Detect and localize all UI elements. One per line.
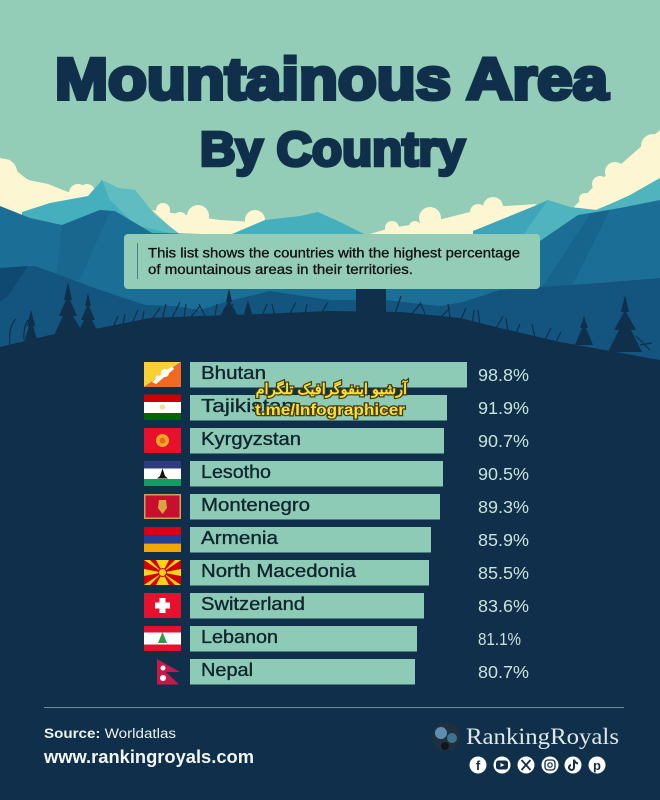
footer divider	[44, 707, 624, 708]
icon: globe logo	[432, 723, 460, 751]
flag: Armenia	[144, 527, 181, 552]
row: Nepal	[157, 659, 529, 684]
row: Montenegro: 89.3%	[478, 497, 529, 517]
clouds	[0, 130, 660, 236]
title	[55, 47, 609, 176]
illustration: clouds and mountains	[0, 130, 660, 365]
row: Kyrgyzstan: 90.7%	[478, 431, 529, 451]
middle blue range	[0, 200, 660, 320]
row: Armenia: 85.9%	[478, 530, 529, 550]
source text: www.rankingroyals.com	[43, 747, 254, 767]
watermark	[255, 379, 409, 419]
row: Lebanon	[144, 626, 521, 652]
row: Bhutan: 98.8%	[478, 365, 529, 385]
flag: Bhutan	[144, 362, 181, 387]
back teal ranges	[22, 180, 182, 240]
intro callout: of mountainous areas in their territories.	[148, 261, 413, 277]
row: Lesotho	[144, 461, 529, 486]
source text	[43, 726, 254, 767]
flag: North Macedonia	[144, 560, 181, 585]
flag: Lesotho	[144, 461, 181, 486]
row: Switzerland: Switzerland	[201, 594, 305, 614]
title: Mountainous Area	[55, 47, 609, 112]
row: Armenia	[144, 527, 529, 552]
trees	[22, 282, 642, 352]
icon: facebook: f	[476, 758, 481, 773]
row: Lebanon: 81.1%	[478, 629, 521, 649]
row: Bhutan: Bhutan	[201, 363, 266, 383]
row: Bhutan	[144, 362, 529, 388]
row: Montenegro	[144, 494, 529, 520]
flag: Nepal	[157, 659, 180, 684]
dark lower panel	[0, 360, 660, 800]
intro callout: This list shows the countries with the highest percentage	[148, 244, 520, 260]
flag: Tajikistan	[144, 394, 181, 420]
flag: Kyrgyzstan	[144, 428, 181, 453]
flag: Lebanon	[144, 626, 181, 651]
icon: X	[518, 756, 534, 774]
row: Kyrgyzstan	[144, 428, 529, 454]
icon: tiktok	[564, 756, 582, 774]
source text: Source: Worldatlas	[44, 726, 176, 741]
row: North Macedonia: 85.5%	[478, 563, 529, 583]
row: North Macedonia: North Macedonia	[201, 561, 357, 581]
row: Lesotho: Lesotho	[201, 462, 271, 482]
flag: Montenegro	[144, 494, 181, 519]
row: Lebanon: Lebanon	[201, 627, 278, 647]
icon: pinterest: p	[593, 758, 601, 773]
icon: instagram	[542, 756, 558, 774]
title: By Country	[200, 124, 465, 176]
watermark: آرشیو اینفوگرافیک تلگرام	[256, 379, 409, 398]
icon: youtube	[494, 756, 510, 774]
flag: Switzerland	[144, 593, 181, 618]
row: Tajikistan	[144, 394, 529, 420]
row: Nepal: Nepal	[201, 660, 253, 680]
intro callout	[124, 234, 540, 289]
lower darker range	[0, 266, 660, 360]
row: Switzerland	[144, 593, 529, 618]
logo: RankingRoyals	[466, 724, 619, 749]
row: Tajikistan: Tajikistan	[201, 396, 294, 416]
foreground hill	[0, 311, 660, 365]
row: Kyrgyzstan: Kyrgyzstan	[201, 429, 301, 449]
row: Montenegro: Montenegro	[201, 495, 310, 515]
logo	[432, 723, 619, 751]
grass strokes	[10, 296, 652, 350]
row: Lesotho: 90.5%	[478, 464, 529, 484]
row: Switzerland: 83.6%	[478, 596, 529, 616]
row: Armenia: Armenia	[201, 528, 279, 548]
row: North Macedonia	[144, 560, 529, 586]
row: Tajikistan: 91.9%	[478, 398, 529, 418]
silhouette post	[356, 285, 386, 330]
row: Nepal: 80.7%	[478, 662, 529, 682]
watermark: t.me/Infographicer	[255, 402, 405, 419]
social icons	[470, 756, 606, 774]
sky background	[0, 0, 660, 360]
